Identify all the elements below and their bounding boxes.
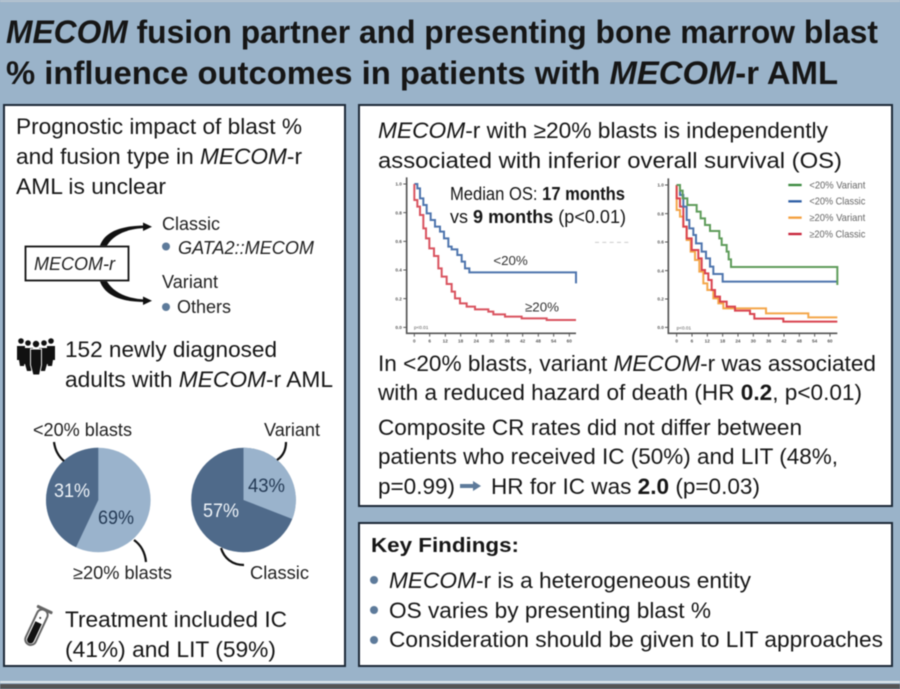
chart: survival by blast and fusion: 48	[797, 338, 802, 343]
text: prognostic impact	[16, 114, 302, 199]
text: composite CR rates: patients who received IC (50%) and LIT (48%,	[378, 444, 838, 469]
pie chart: blast percentage: 31%	[54, 481, 90, 502]
pie chart: blast percentage	[33, 420, 172, 583]
icon: people	[17, 338, 55, 375]
chart: survival by blast and fusion: 0.4	[657, 268, 664, 273]
title	[6, 14, 878, 91]
chart: survival by blast and fusion: 24	[735, 338, 741, 343]
chart: survival by blast percentage: 1.0	[395, 182, 402, 187]
chart: survival by blast percentage: 24	[474, 338, 479, 343]
chart: survival by blast and fusion: 0.0	[657, 325, 664, 330]
text: cohort: adults with MECOM-r AML	[65, 367, 333, 392]
pie chart: fusion type: 43%	[248, 476, 285, 497]
legend: <20% Variant	[809, 180, 866, 191]
diagram: MECOM-r fusion types: MECOM-r	[34, 254, 116, 274]
title: MECOM fusion partner and presenting bone marrow blast	[6, 14, 878, 50]
legend: <20% Classic	[809, 197, 865, 208]
finding 1: MECOM-r is a heterogeneous entity	[389, 568, 751, 593]
chart: survival by blast percentage: 6	[428, 338, 431, 343]
diagram: MECOM-r fusion types	[26, 214, 314, 317]
chart: survival by blast percentage: 0.6	[395, 239, 402, 244]
chart: survival by blast percentage: ≥20%	[525, 300, 559, 315]
pie chart: blast percentage: <20% blasts	[33, 420, 132, 440]
chart: survival by blast percentage: 0.4	[395, 268, 402, 273]
chart: survival by blast percentage: 30	[489, 338, 495, 343]
text: hazard of death: with a reduced hazard of death (HR 0.2, p<0.01)	[377, 380, 862, 405]
chart: survival by blast and fusion: 0	[675, 338, 678, 343]
chart: survival by blast and fusion: 0.6	[657, 240, 664, 245]
chart: survival by blast percentage: 42	[520, 338, 526, 343]
pie chart: fusion type: Variant	[264, 420, 320, 440]
heading: survival: MECOM-r with ≥20% blasts is independently	[378, 118, 828, 143]
legend	[788, 180, 866, 240]
title: % influence outcomes in patients with MECOM-r AML	[6, 55, 838, 91]
text: hazard of death	[377, 351, 876, 405]
chart: survival by blast and fusion: 1.0	[657, 183, 664, 188]
text: composite CR rates: Composite CR rates did not differ between	[378, 415, 802, 440]
finding 3: Consideration should be given to LIT approaches	[389, 627, 883, 652]
chart: survival by blast percentage	[395, 177, 630, 343]
diagram: MECOM-r fusion types: Variant	[162, 272, 218, 292]
panel: survival results	[359, 105, 892, 506]
finding 2: OS varies by presenting blast %	[389, 598, 711, 623]
diagram: MECOM-r fusion types: Classic	[162, 214, 220, 234]
chart: survival by blast and fusion: 36	[766, 338, 772, 343]
chart: survival by blast and fusion: 12	[705, 338, 710, 343]
text: composite CR rates: p=0.99)	[378, 474, 455, 499]
pie chart: fusion type: 57%	[203, 501, 239, 522]
diagram: MECOM-r fusion types: GATA2::MECOM	[178, 238, 314, 258]
text: prognostic impact: and fusion type in MECOM-r	[16, 144, 302, 169]
panel: background and cohort	[4, 105, 345, 666]
chart: survival by blast and fusion: 42	[781, 338, 787, 343]
pie chart: fusion type	[191, 420, 320, 583]
chart: survival by blast and fusion: p<0.01	[677, 325, 691, 330]
chart: survival by blast percentage: p<0.01	[414, 325, 429, 330]
chart: survival by blast percentage: 18	[458, 338, 464, 343]
text: treatment: (41%) and LIT (59%)	[65, 637, 276, 662]
text: composite CR rates	[378, 415, 838, 499]
heading: survival: associated with inferior overall survival (OS)	[378, 148, 842, 173]
chart: survival by blast percentage: 36	[505, 338, 510, 343]
pie chart: fusion type: Classic	[250, 563, 309, 583]
legend: ≥20% Variant	[809, 213, 866, 224]
chart: survival by blast percentage: 60	[567, 338, 572, 343]
chart: survival by blast percentage: 0.0	[395, 325, 402, 330]
text: prognostic impact: AML is unclear	[16, 174, 166, 199]
chart: survival by blast percentage: 54	[551, 338, 557, 343]
text: cohort	[65, 337, 333, 392]
pie chart: blast percentage: 69%	[98, 508, 134, 529]
chart: survival by blast and fusion: 54	[812, 338, 818, 343]
chart: survival by blast and fusion: 0.8	[657, 211, 664, 216]
chart: survival by blast and fusion: 60	[827, 338, 833, 343]
text: cohort: 152 newly diagnosed	[65, 337, 277, 362]
chart: survival by blast percentage: 12	[443, 338, 448, 343]
diagram: MECOM-r fusion types: Others	[177, 297, 231, 317]
chart: survival by blast and fusion: 0.2	[657, 297, 664, 302]
chart: survival by blast and fusion: 30	[751, 338, 756, 343]
text: treatment	[65, 607, 287, 662]
chart: survival by blast percentage: 0.2	[395, 296, 402, 301]
pie chart: blast percentage: ≥20% blasts	[73, 563, 172, 583]
text: hazard of death: In <20% blasts, variant MECOM-r was associated	[378, 351, 876, 376]
text: composite CR rates: HR for IC was 2.0 (p=0.03)	[491, 474, 760, 499]
chart: survival by blast percentage: <20%	[493, 253, 528, 268]
text: treatment: Treatment included IC	[65, 607, 287, 632]
panel: key findings	[359, 523, 892, 666]
legend: ≥20% Classic	[809, 229, 865, 240]
text: median OS	[450, 184, 626, 227]
icon: test tube	[21, 605, 53, 648]
arrow	[460, 481, 481, 491]
text: median OS: Median OS: 17 months	[450, 184, 625, 204]
chart: survival by blast percentage: 0	[413, 338, 416, 343]
heading: key findings: Key Findings:	[371, 535, 519, 557]
text: median OS: vs 9 months (p<0.01)	[450, 207, 626, 227]
chart: survival by blast and fusion	[657, 178, 866, 343]
chart: survival by blast percentage: 48	[536, 338, 541, 343]
chart: survival by blast and fusion: 18	[720, 338, 726, 343]
heading: survival	[378, 118, 842, 173]
chart: survival by blast percentage: 0.8	[395, 210, 402, 215]
text: prognostic impact: Prognostic impact of blast %	[16, 114, 302, 139]
chart: survival by blast and fusion: 6	[691, 338, 694, 343]
